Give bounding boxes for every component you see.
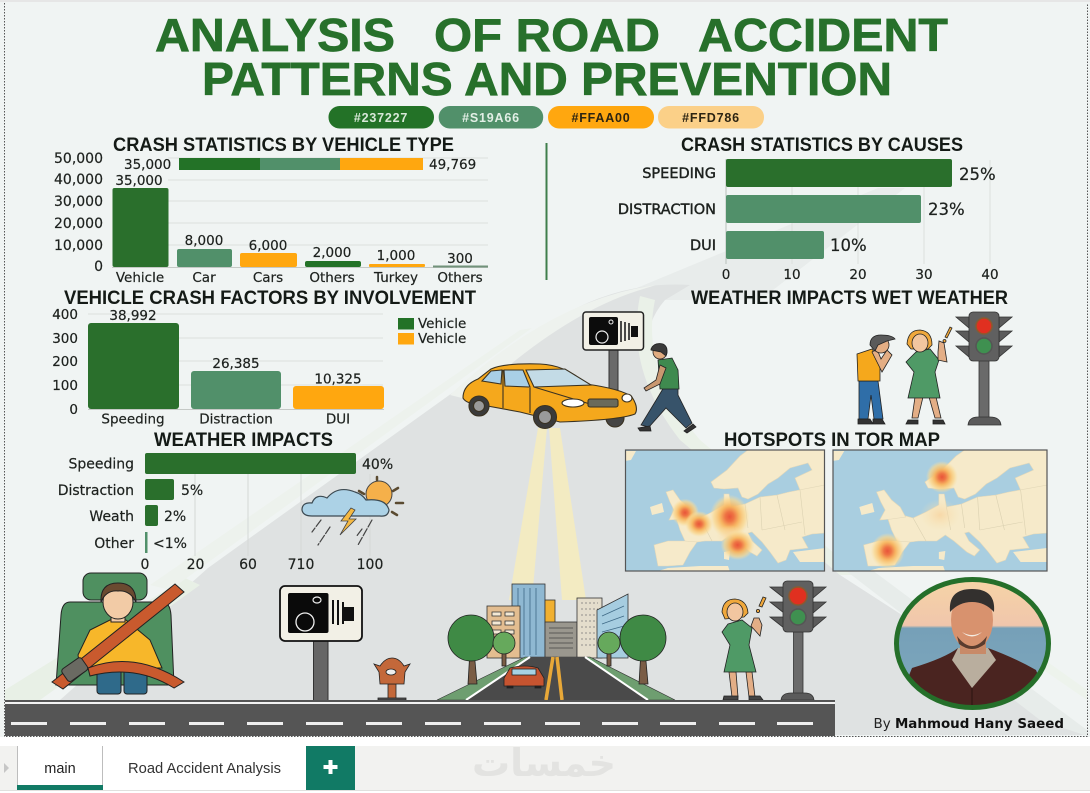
- trees: [448, 615, 666, 684]
- heading: weather impacts wet weather: WEATHER IMPACTS WET WEATHER: [691, 288, 1008, 309]
- icon: small roadside marker: [374, 658, 410, 700]
- cause labels: [618, 166, 716, 254]
- button: add sheet: [306, 746, 355, 790]
- heading: CRASH STATISTICS BY CAUSES: [681, 135, 963, 156]
- y axis labels: 0: [94, 259, 103, 275]
- category labels: Others: [309, 270, 355, 286]
- heading: VEHICLE CRASH FACTORS BY INVOLVEMENT: [64, 288, 476, 309]
- percentage labels: 2%: [164, 509, 186, 525]
- title: OF ROAD: [434, 9, 660, 61]
- stacked summary bar: 35,000: [124, 157, 171, 173]
- pill: orange: [548, 106, 654, 128]
- bars: [145, 453, 356, 553]
- icon: traffic light lower: [770, 581, 826, 700]
- x axis labels: 0: [141, 557, 149, 573]
- category labels: DUI: [326, 412, 350, 428]
- row labels: Distraction: [58, 483, 134, 499]
- percentage labels: 5%: [181, 483, 203, 499]
- category labels: [116, 270, 483, 286]
- x axis labels: 710: [288, 557, 314, 573]
- percentage labels: <1%: [153, 536, 187, 552]
- map: hotspots right: [832, 450, 1047, 572]
- panel: weather impacts: [58, 430, 403, 573]
- icon: driver wearing seatbelt: [52, 573, 184, 694]
- pill: dark green: [328, 106, 434, 128]
- watermark: خمسات: [472, 741, 616, 785]
- percentage labels: [830, 165, 996, 255]
- pill: dark green: #237227: [354, 111, 408, 125]
- bar value labels: 300: [447, 251, 473, 267]
- row labels: Speeding: [68, 456, 134, 472]
- tab bar: [0, 741, 1090, 791]
- divider: [546, 143, 548, 280]
- title: [155, 9, 948, 105]
- bar value labels: 1,000: [377, 248, 415, 264]
- bar value labels: 35,000: [115, 173, 163, 189]
- title: ACCIDENT: [698, 9, 948, 61]
- row labels: Other: [94, 536, 134, 552]
- y axis labels: 200: [52, 354, 78, 370]
- x axis labels: 10: [783, 267, 801, 283]
- portrait of author: [895, 580, 1052, 710]
- tab: main: main: [44, 761, 76, 777]
- small red car: [504, 666, 544, 688]
- tab: road accident analysis: [103, 746, 306, 790]
- legend: [398, 316, 466, 347]
- icon: woman with exclamation: [722, 597, 766, 700]
- buildings: [487, 584, 628, 658]
- bars: [726, 159, 952, 259]
- x axis labels: [722, 267, 999, 283]
- category labels: Speeding: [101, 412, 165, 428]
- author credit: By Mahmoud Hany Saeed: [874, 716, 1064, 732]
- icon: speed camera sign centre: [583, 312, 644, 390]
- value labels: [109, 308, 362, 388]
- map: hotspots left: [625, 450, 825, 572]
- title: ANALYSIS: [155, 9, 395, 61]
- tab: main: [17, 746, 103, 790]
- category labels: [101, 412, 350, 428]
- y axis labels: 10,000: [54, 238, 103, 254]
- arrow: scroll tabs: [4, 763, 9, 773]
- x axis labels: 60: [239, 557, 257, 573]
- cause labels: SPEEDING: [642, 166, 716, 182]
- bar value labels: 2,000: [313, 245, 351, 261]
- y axis labels: 30,000: [54, 194, 103, 210]
- bar value labels: 6,000: [249, 238, 287, 254]
- x axis labels: 20: [849, 267, 867, 283]
- icon: orange car: [463, 364, 636, 428]
- heading: WEATHER IMPACTS: [154, 430, 333, 451]
- category labels: Vehicle: [116, 270, 164, 286]
- row labels: Weath: [89, 509, 134, 525]
- stacked summary bar: [124, 157, 476, 173]
- row labels: [58, 456, 134, 552]
- legend: Vehicle: [418, 331, 466, 347]
- bar value labels: 8,000: [185, 233, 223, 249]
- icon: speed camera sign lower: [280, 586, 362, 701]
- colour palette pills: [328, 106, 764, 128]
- panel: vehicle crash factors by involvement: [52, 288, 476, 428]
- value labels: 26,385: [212, 356, 260, 372]
- pill: mid green: #S19A66: [462, 111, 520, 125]
- percentage labels: 23%: [928, 200, 965, 219]
- illustration: city road and buildings: [437, 584, 675, 700]
- y axis labels: 40,000: [54, 172, 103, 188]
- percentage labels: 10%: [830, 236, 867, 255]
- pill: orange: #FFAA00: [571, 111, 631, 125]
- value labels: 38,992: [109, 308, 157, 324]
- y axis labels: 50,000: [54, 151, 103, 167]
- x axis labels: 100: [357, 557, 383, 573]
- bar value labels: [115, 173, 473, 267]
- pill: light orange: [658, 106, 764, 128]
- y axis labels: [52, 307, 78, 418]
- value labels: 10,325: [314, 372, 362, 388]
- category labels: Cars: [253, 270, 283, 286]
- bars: [112, 188, 488, 268]
- icon: storm cloud and sun: [302, 477, 403, 545]
- y axis labels: 400: [52, 307, 78, 323]
- bars: [88, 323, 384, 409]
- y axis labels: [54, 151, 103, 275]
- x axis labels: [141, 557, 383, 573]
- percentage labels: [153, 457, 393, 552]
- percentage labels: 25%: [959, 165, 996, 184]
- x axis labels: 40: [981, 267, 999, 283]
- legend: Vehicle: [418, 316, 466, 332]
- road strip with lane dashes: [5, 700, 835, 736]
- x axis labels: 0: [722, 267, 730, 283]
- icon: man on phone: [857, 335, 895, 424]
- icon: woman on phone: [906, 327, 952, 424]
- percentage labels: 40%: [362, 457, 393, 473]
- category labels: Others: [437, 270, 483, 286]
- category labels: Distraction: [199, 412, 273, 428]
- pill: mid green: [439, 106, 543, 128]
- cause labels: DUI: [690, 238, 716, 254]
- title: PATTERNS AND PREVENTION: [202, 53, 892, 105]
- y axis labels: 300: [52, 331, 78, 347]
- tab: road accident analysis: Road Accident Analysis: [128, 761, 281, 777]
- panel: crash statistics by vehicle type: [54, 135, 488, 286]
- cause labels: DISTRACTION: [618, 202, 716, 218]
- y axis labels: 100: [52, 378, 78, 394]
- y axis labels: 20,000: [54, 216, 103, 232]
- stacked summary bar: 49,769: [429, 157, 476, 173]
- panel: crash statistics by causes: [618, 135, 999, 283]
- category labels: Car: [192, 270, 216, 286]
- y axis labels: 0: [69, 402, 78, 418]
- x axis labels: 30: [915, 267, 933, 283]
- road: [437, 657, 675, 700]
- heading: CRASH STATISTICS BY VEHICLE TYPE: [113, 135, 454, 156]
- icon: pedestrian: [638, 344, 696, 433]
- x axis labels: 20: [187, 557, 204, 573]
- pill: light orange: #FFD786: [682, 111, 740, 125]
- heading: hotspots map: HOTSPOTS IN TOR MAP: [724, 430, 940, 451]
- category labels: Turkey: [373, 270, 418, 286]
- icon: traffic light upper: [956, 312, 1012, 425]
